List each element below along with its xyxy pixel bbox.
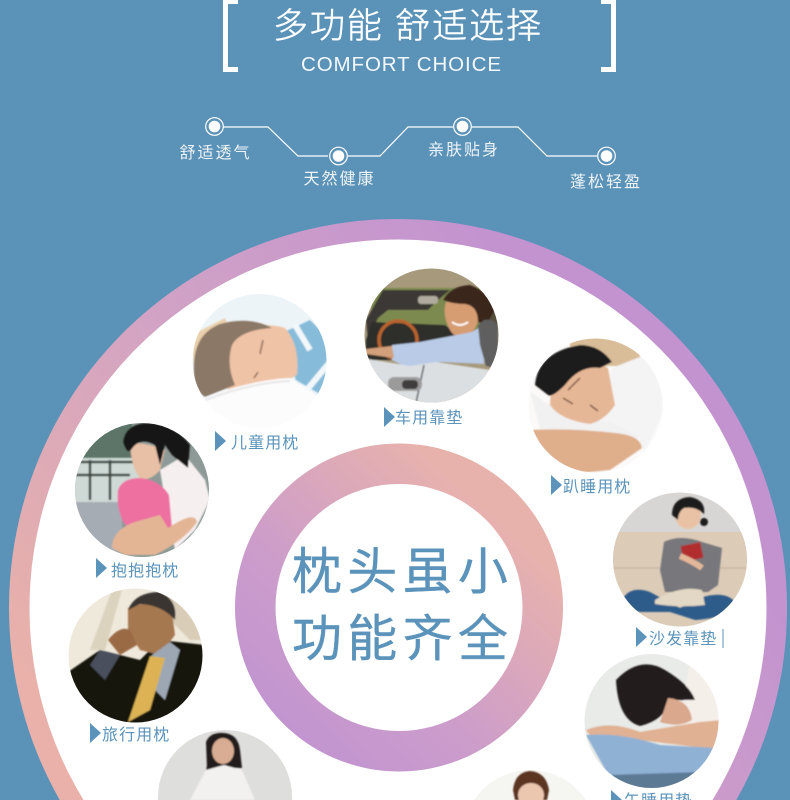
central ring with slogan [235, 444, 563, 771]
label: 旅行用枕: 旅行用枕 [102, 726, 170, 744]
photo: woman bottom right [474, 770, 586, 800]
node: 天然健康: 天然健康 [304, 170, 376, 188]
label: 趴睡用枕: 趴睡用枕 [563, 478, 631, 496]
label: 沙发靠垫 [636, 627, 724, 648]
photo: hugging pillow [72, 420, 212, 560]
large gradient ring panel [9, 219, 787, 800]
photo: child sleeping [192, 294, 326, 401]
label: 儿童用枕 [215, 431, 299, 452]
node: 亲肤贴身: 亲肤贴身 [428, 141, 500, 159]
title block [223, 0, 616, 76]
chinese heading: 多功能 舒适选择 [273, 7, 541, 46]
label: 沙发靠垫: 沙发靠垫 [649, 630, 717, 648]
node: 亲肤贴身 [428, 118, 500, 159]
feature timeline [180, 118, 642, 191]
node: 蓬松轻盈 [570, 147, 642, 191]
slogan line 2: 功能齐全 [292, 611, 513, 667]
right bracket [601, 0, 616, 72]
label: 旅行用枕 [90, 723, 170, 744]
slogan line 1: 枕头虽小 [292, 544, 513, 600]
photo: sleeping man [526, 336, 666, 476]
node: 舒适透气 [180, 118, 252, 162]
label: 车用靠垫: 车用靠垫 [395, 409, 463, 427]
photo: nap on pillow [582, 652, 722, 792]
node: 天然健康 [304, 147, 376, 188]
label: 午睡用垫 [611, 790, 692, 800]
photo: sofa [611, 490, 751, 632]
photo: man in car [362, 266, 502, 406]
node: 舒适透气: 舒适透气 [180, 144, 252, 162]
left bracket [223, 0, 238, 72]
label: 趴睡用枕 [551, 475, 631, 496]
english heading: COMFORT CHOICE [301, 53, 501, 76]
photo: travel pillow [66, 586, 206, 726]
label: 儿童用枕: 儿童用枕 [231, 433, 299, 452]
label: 抱抱抱枕: 抱抱抱枕 [111, 562, 179, 580]
photo: meditating woman [155, 728, 295, 800]
label: 抱抱抱枕 [96, 558, 179, 580]
node: 蓬松轻盈: 蓬松轻盈 [570, 173, 642, 191]
